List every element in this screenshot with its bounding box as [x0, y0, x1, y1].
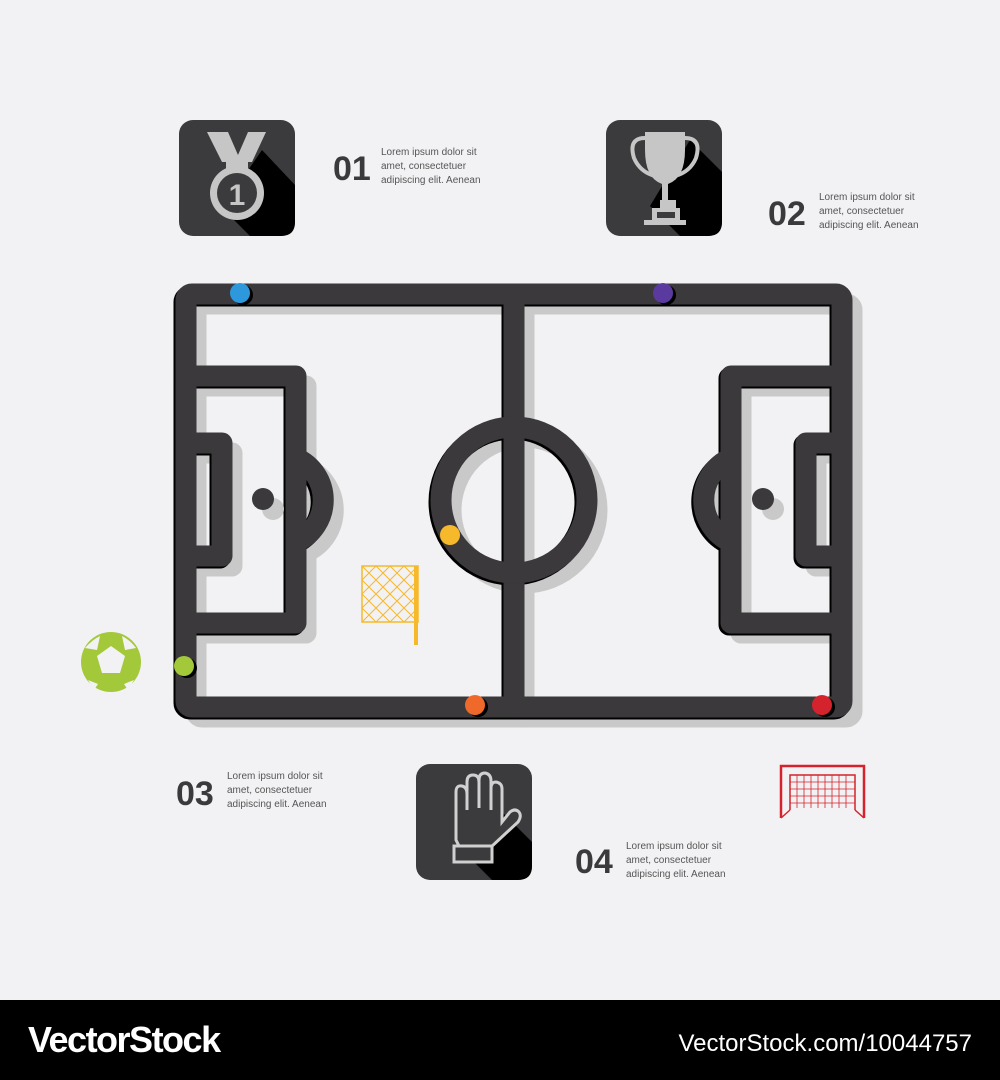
text block 04 — [575, 841, 726, 881]
text block 02: amet, consectetuer — [819, 206, 905, 217]
text block 02 — [768, 192, 919, 233]
icon: trophy box — [606, 120, 722, 236]
text block 01: 01 — [333, 150, 371, 188]
icon: glove box — [416, 764, 532, 880]
text block 01 — [333, 147, 481, 188]
text block 04: adipiscing elit. Aenean — [626, 869, 726, 880]
field — [184, 294, 852, 717]
footer: VectorStock — [28, 1019, 222, 1060]
text block 01: adipiscing elit. Aenean — [381, 175, 481, 186]
text block 02: adipiscing elit. Aenean — [819, 220, 919, 231]
dots — [174, 283, 835, 717]
icon: soccer ball — [81, 632, 141, 692]
icon: medal box: 1 — [229, 179, 245, 212]
icon: corner flag — [362, 566, 418, 645]
footer: VectorStock.com/10044757 — [678, 1030, 972, 1057]
text block 04: Lorem ipsum dolor sit — [626, 841, 722, 852]
text block 04: 04 — [575, 843, 613, 881]
text block 02: Lorem ipsum dolor sit — [819, 192, 915, 203]
text block 01: Lorem ipsum dolor sit — [381, 147, 477, 158]
text block 01: amet, consectetuer — [381, 161, 467, 172]
text block 03: 03 — [176, 775, 214, 813]
text block 04: amet, consectetuer — [626, 855, 712, 866]
footer — [0, 1000, 1000, 1080]
icon: medal box — [179, 120, 295, 236]
text block 03: Lorem ipsum dolor sit — [227, 771, 323, 782]
text block 03: amet, consectetuer — [227, 785, 313, 796]
text block 02: 02 — [768, 195, 806, 233]
text block 03 — [176, 771, 327, 813]
text block 03: adipiscing elit. Aenean — [227, 799, 327, 810]
icon: goal — [781, 766, 864, 818]
